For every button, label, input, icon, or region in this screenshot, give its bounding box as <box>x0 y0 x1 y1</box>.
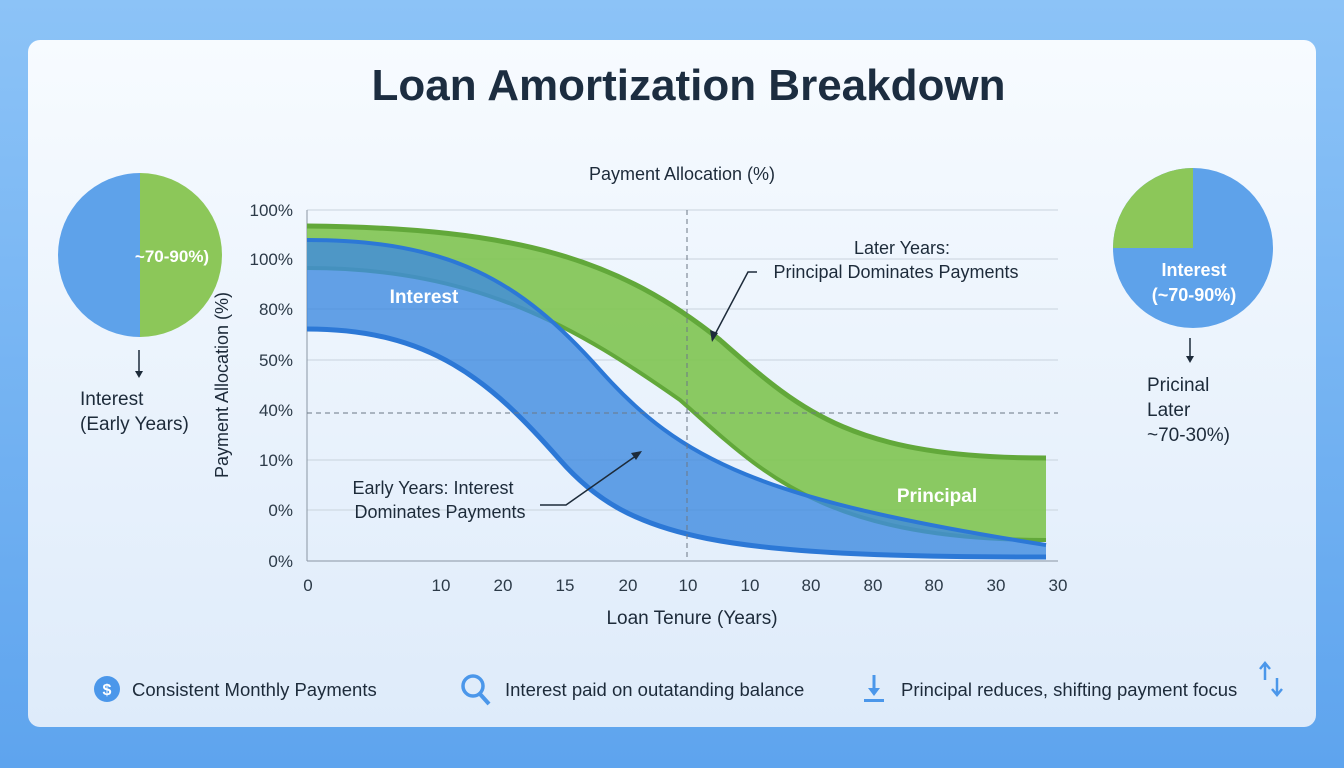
right annotation <box>1147 338 1230 446</box>
footer item 3: Principal reduces, shifting payment focus <box>901 679 1237 700</box>
title: Loan Amortization Breakdown <box>372 61 1005 110</box>
right annotation: Later <box>1147 400 1191 421</box>
x axis labels: 30 <box>987 576 1005 595</box>
y axis labels: 80% <box>259 300 293 319</box>
left annotation <box>80 350 189 435</box>
x axis labels: 80 <box>925 576 943 595</box>
x axis labels: 10 <box>432 576 450 595</box>
chart title: Payment Allocation (%) <box>589 164 775 184</box>
x axis labels: 80 <box>802 576 820 595</box>
pie right <box>1113 168 1273 328</box>
x axis labels <box>303 576 1067 595</box>
right annotation: Pricinal <box>1147 375 1209 396</box>
right annotation: ~70-30%) <box>1147 425 1230 446</box>
callout: early years <box>352 451 642 522</box>
y axis labels: 0% <box>268 552 293 571</box>
callout: later years: Principal Dominates Payments <box>773 262 1019 282</box>
y axis labels: 40% <box>259 401 293 420</box>
pie right: Interest <box>1161 260 1227 280</box>
footer item 2 <box>463 676 804 704</box>
x axis labels: 10 <box>741 576 759 595</box>
footer item 2: Interest paid on outatanding balance <box>505 679 804 700</box>
callout: early years: Dominates Payments <box>354 502 526 522</box>
x axis title: Loan Tenure (Years) <box>606 608 778 629</box>
callout: later years: Later Years: <box>854 238 950 258</box>
y axis labels: 0% <box>268 501 293 520</box>
left annotation: Interest <box>80 389 144 410</box>
green band: principal <box>307 226 1046 540</box>
callout: early years: Early Years: Interest <box>352 478 514 498</box>
footer item 1 <box>94 676 377 702</box>
y axis title: Payment Allocation (%) <box>212 292 232 478</box>
pie left <box>58 173 222 337</box>
x axis labels: 80 <box>864 576 882 595</box>
x axis labels: 20 <box>619 576 637 595</box>
pie left: ~70-90%) <box>135 247 209 266</box>
left annotation: (Early Years) <box>80 414 189 435</box>
callout: later years <box>710 238 1019 342</box>
pie right: (~70-90%) <box>1152 285 1236 305</box>
x axis labels: 0 <box>303 576 313 595</box>
x axis labels: 20 <box>494 576 512 595</box>
footer item 1: Consistent Monthly Payments <box>132 679 377 700</box>
dashed guides <box>307 210 1058 561</box>
x axis labels: 10 <box>679 576 697 595</box>
y axis labels: 100% <box>250 250 293 269</box>
x axis labels: 30 <box>1049 576 1067 595</box>
icon: up/down arrows <box>1260 663 1282 695</box>
chart: Principal <box>897 486 977 507</box>
footer item 1: $ <box>103 682 112 699</box>
blue band: interest <box>307 240 1046 557</box>
y axis labels <box>250 201 293 571</box>
band labels: Interest <box>390 287 459 308</box>
y axis labels: 100% <box>250 201 293 220</box>
y axis labels: 50% <box>259 351 293 370</box>
y axis labels: 10% <box>259 451 293 470</box>
x axis labels: 15 <box>556 576 574 595</box>
